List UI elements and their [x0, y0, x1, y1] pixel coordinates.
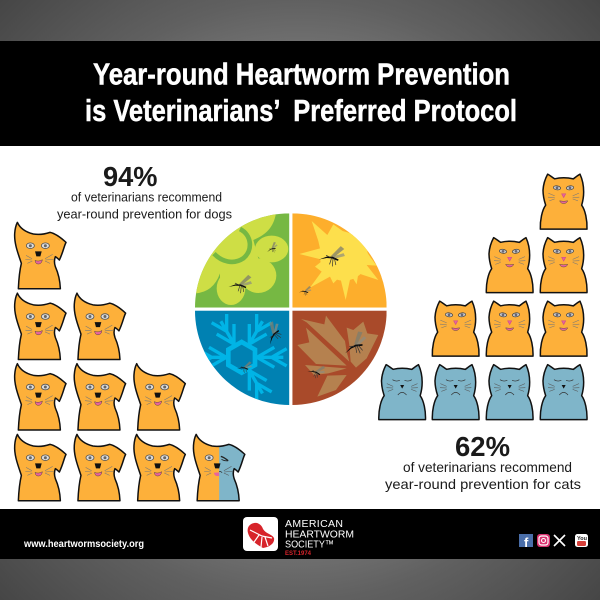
icon: dog row 1: [15, 222, 66, 289]
title line 2: is Veterinarians’ Preferred Protocol: [85, 94, 517, 128]
title banner: [0, 41, 600, 146]
white content panel: [0, 146, 600, 509]
icons: dog row 3: [15, 364, 185, 430]
icon: Instagram: [537, 534, 550, 547]
icon: Facebook: f: [524, 535, 529, 550]
94 percent figure: 94%: [103, 161, 158, 192]
cat recommendation line 2: year-round prevention for cats: [385, 476, 581, 492]
icons: dog row 2: [15, 293, 126, 359]
icon: red heart with mosquito: [248, 523, 274, 548]
dog statistic text: [57, 161, 232, 222]
panel: winter quadrant: [195, 310, 290, 405]
panel: autumn quadrant: [292, 310, 387, 405]
logo wordmark: AMERICAN: [285, 518, 343, 530]
title line 1: Year-round Heartworm Prevention: [93, 58, 510, 92]
dog recommendation line 1: of veterinarians recommend: [71, 190, 222, 204]
icons: cat row 2: [486, 238, 587, 293]
logo wordmark: EST.1974: [285, 551, 312, 557]
dog pictogram chart: [15, 222, 245, 501]
logo wordmark: SOCIETY™: [285, 538, 334, 550]
panel: spring quadrant: [195, 213, 290, 308]
logo wordmark: HEARTWORM: [285, 528, 354, 540]
dog recommendation line 2: year-round prevention for dogs: [57, 206, 232, 222]
icons: sad blue cat row: [379, 365, 587, 420]
website address: www.heartwormsociety.org: [23, 538, 144, 550]
icons: dog row 4: [15, 434, 185, 501]
cat recommendation line 1: of veterinarians recommend: [403, 459, 572, 475]
logo wordmark: [285, 518, 354, 557]
62 percent figure: 62%: [455, 431, 510, 462]
cat pictogram chart: [379, 174, 587, 420]
panel: summer quadrant: [292, 213, 387, 308]
four seasons pie chart: [190, 205, 390, 408]
social media icons: [519, 534, 588, 550]
icon: X: [552, 534, 567, 547]
icon: YouTube: You: [577, 536, 587, 542]
cat statistic text: [385, 431, 581, 492]
footer bar: [0, 509, 600, 559]
icon: half orange half blue dog: [193, 434, 245, 501]
icons: cat row 3: [432, 301, 587, 356]
logo: American Heartworm Society: [243, 517, 354, 557]
icon: cat row 1: [540, 174, 587, 229]
